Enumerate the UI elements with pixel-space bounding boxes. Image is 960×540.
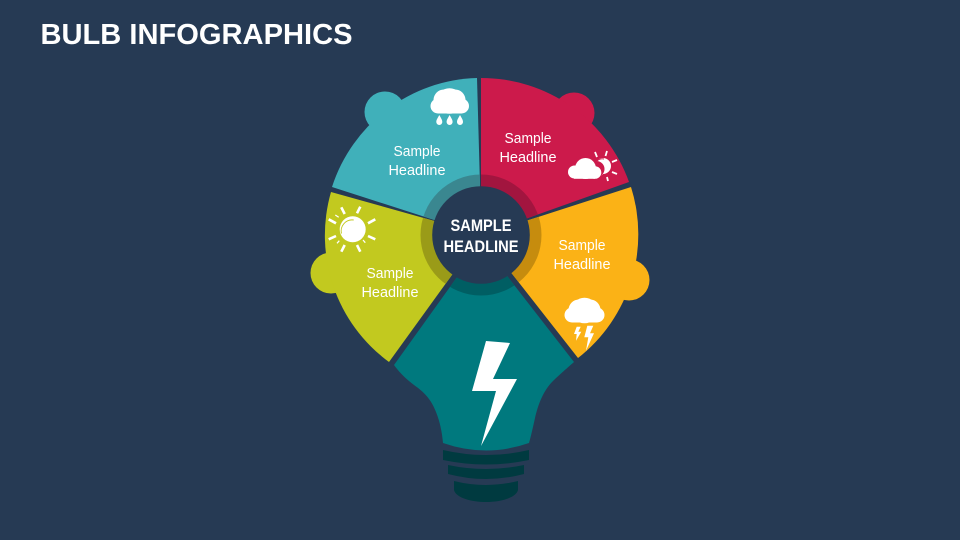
icon: sun behind cloud (568, 151, 617, 181)
panel: yellow storm segment (512, 187, 650, 358)
label: green segment: Headline (362, 285, 418, 301)
label: red segment: Headline (500, 150, 556, 166)
title: BULB INFOGRAPHICS (40, 19, 352, 51)
label: center headline: SAMPLE (450, 216, 512, 235)
panel: bulb base glass (394, 276, 574, 450)
panel: red sun and cloud segment (481, 78, 629, 218)
label: red segment: Sample (504, 131, 552, 147)
label: center headline: HEADLINE (444, 237, 518, 256)
panel: teal rain segment (332, 78, 480, 220)
panel: green sun segment (310, 192, 452, 362)
icon: storm cloud (564, 298, 604, 351)
icon: sun (329, 207, 375, 252)
label: teal segment (388, 144, 446, 179)
label: green segment (362, 266, 418, 301)
label: yellow segment: Headline (554, 257, 610, 273)
label: teal segment: Headline (388, 163, 446, 179)
label: yellow segment: Sample (558, 238, 606, 254)
icon: rain cloud (430, 88, 469, 125)
panel: bulb screw base (443, 450, 529, 502)
bulb infographic (310, 78, 650, 502)
label: teal segment: Sample (394, 144, 440, 160)
icon: lightning bolt (472, 341, 517, 446)
label: center headline (444, 216, 518, 256)
label: yellow segment (554, 238, 610, 273)
label: red segment (500, 131, 556, 166)
center circle (432, 186, 530, 284)
label: green segment: Sample (366, 266, 414, 282)
